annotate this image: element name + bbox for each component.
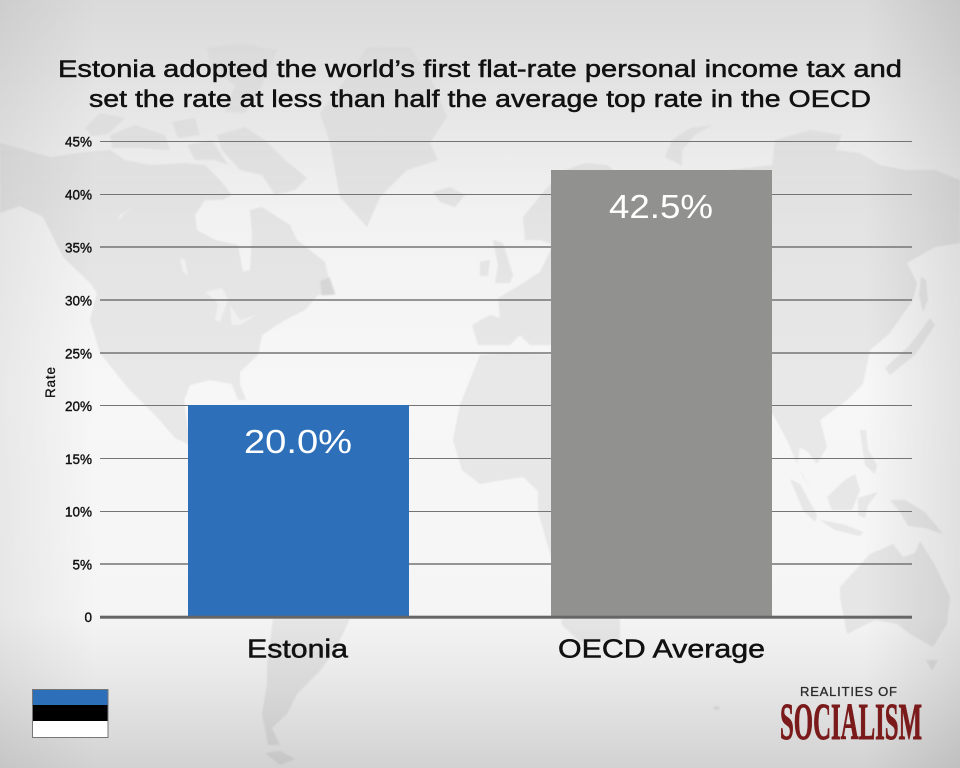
map: speck <box>713 706 720 710</box>
map: Great Britain <box>493 240 513 283</box>
y-axis labels: 0 <box>84 610 92 625</box>
y-axis labels: 10% <box>65 504 92 520</box>
map: Tasmania <box>926 660 938 671</box>
logo: Realities of Socialism: REALITIES OF <box>800 684 897 699</box>
map: Sulawesi <box>858 492 878 518</box>
bar: OECD Average: 42.5% <box>609 188 713 225</box>
map: Iceland <box>433 187 465 207</box>
map: New Guinea <box>890 500 943 534</box>
title <box>58 56 902 113</box>
map: Java <box>820 520 863 536</box>
map: lakes <box>118 204 256 325</box>
y-axis gridlines <box>100 142 912 564</box>
title: set the rate at less than half the average top rate in the OECD <box>89 86 871 113</box>
bar: Estonia <box>188 405 409 616</box>
bar chart <box>43 134 912 664</box>
map: Borneo <box>827 474 860 510</box>
bar: Estonia: 20.0% <box>244 423 352 460</box>
map: Arctic islands <box>110 125 170 150</box>
map: South America <box>262 619 350 745</box>
category label: OECD Average: OECD Average <box>558 634 765 664</box>
map: Scandinavia and Europe <box>472 163 620 345</box>
y-axis labels: 30% <box>65 294 92 308</box>
map: Africa <box>453 353 620 642</box>
y-axis labels: 25% <box>65 346 92 362</box>
map: Kamchatka <box>919 277 928 312</box>
logo: Realities of Socialism <box>780 684 922 751</box>
map: Tierra del Fuego <box>265 751 295 765</box>
icon: Estonian flag <box>32 689 108 738</box>
map: Asia <box>640 130 960 494</box>
map: Newfoundland <box>320 277 336 296</box>
y-axis labels: 40% <box>65 188 92 202</box>
y-axis labels: 45% <box>65 134 92 150</box>
category label: Estonia: Estonia <box>247 634 349 664</box>
map: Sumatra <box>790 479 817 522</box>
baseline <box>100 616 912 619</box>
map: Ireland <box>480 260 490 276</box>
map: Baffin Island <box>217 127 307 195</box>
map: Greenland <box>320 47 447 227</box>
map: Ellesmere <box>207 43 277 113</box>
y-axis labels: 15% <box>65 452 92 467</box>
y-axis labels: 35% <box>65 240 92 256</box>
map: North America <box>0 143 335 445</box>
map: Australia <box>840 541 950 647</box>
y-axis labels: 5% <box>72 558 92 572</box>
map: Novaya Zemlya <box>665 125 713 166</box>
y-axis labels: 20% <box>65 399 92 414</box>
y-axis title: Rate <box>43 367 58 398</box>
map: Japan <box>885 318 935 375</box>
bar: OECD Average <box>551 170 772 616</box>
y-axis labels <box>65 134 92 625</box>
title: Estonia adopted the world’s first flat-rate personal income tax and <box>58 56 902 83</box>
map: Philippines <box>860 430 877 474</box>
